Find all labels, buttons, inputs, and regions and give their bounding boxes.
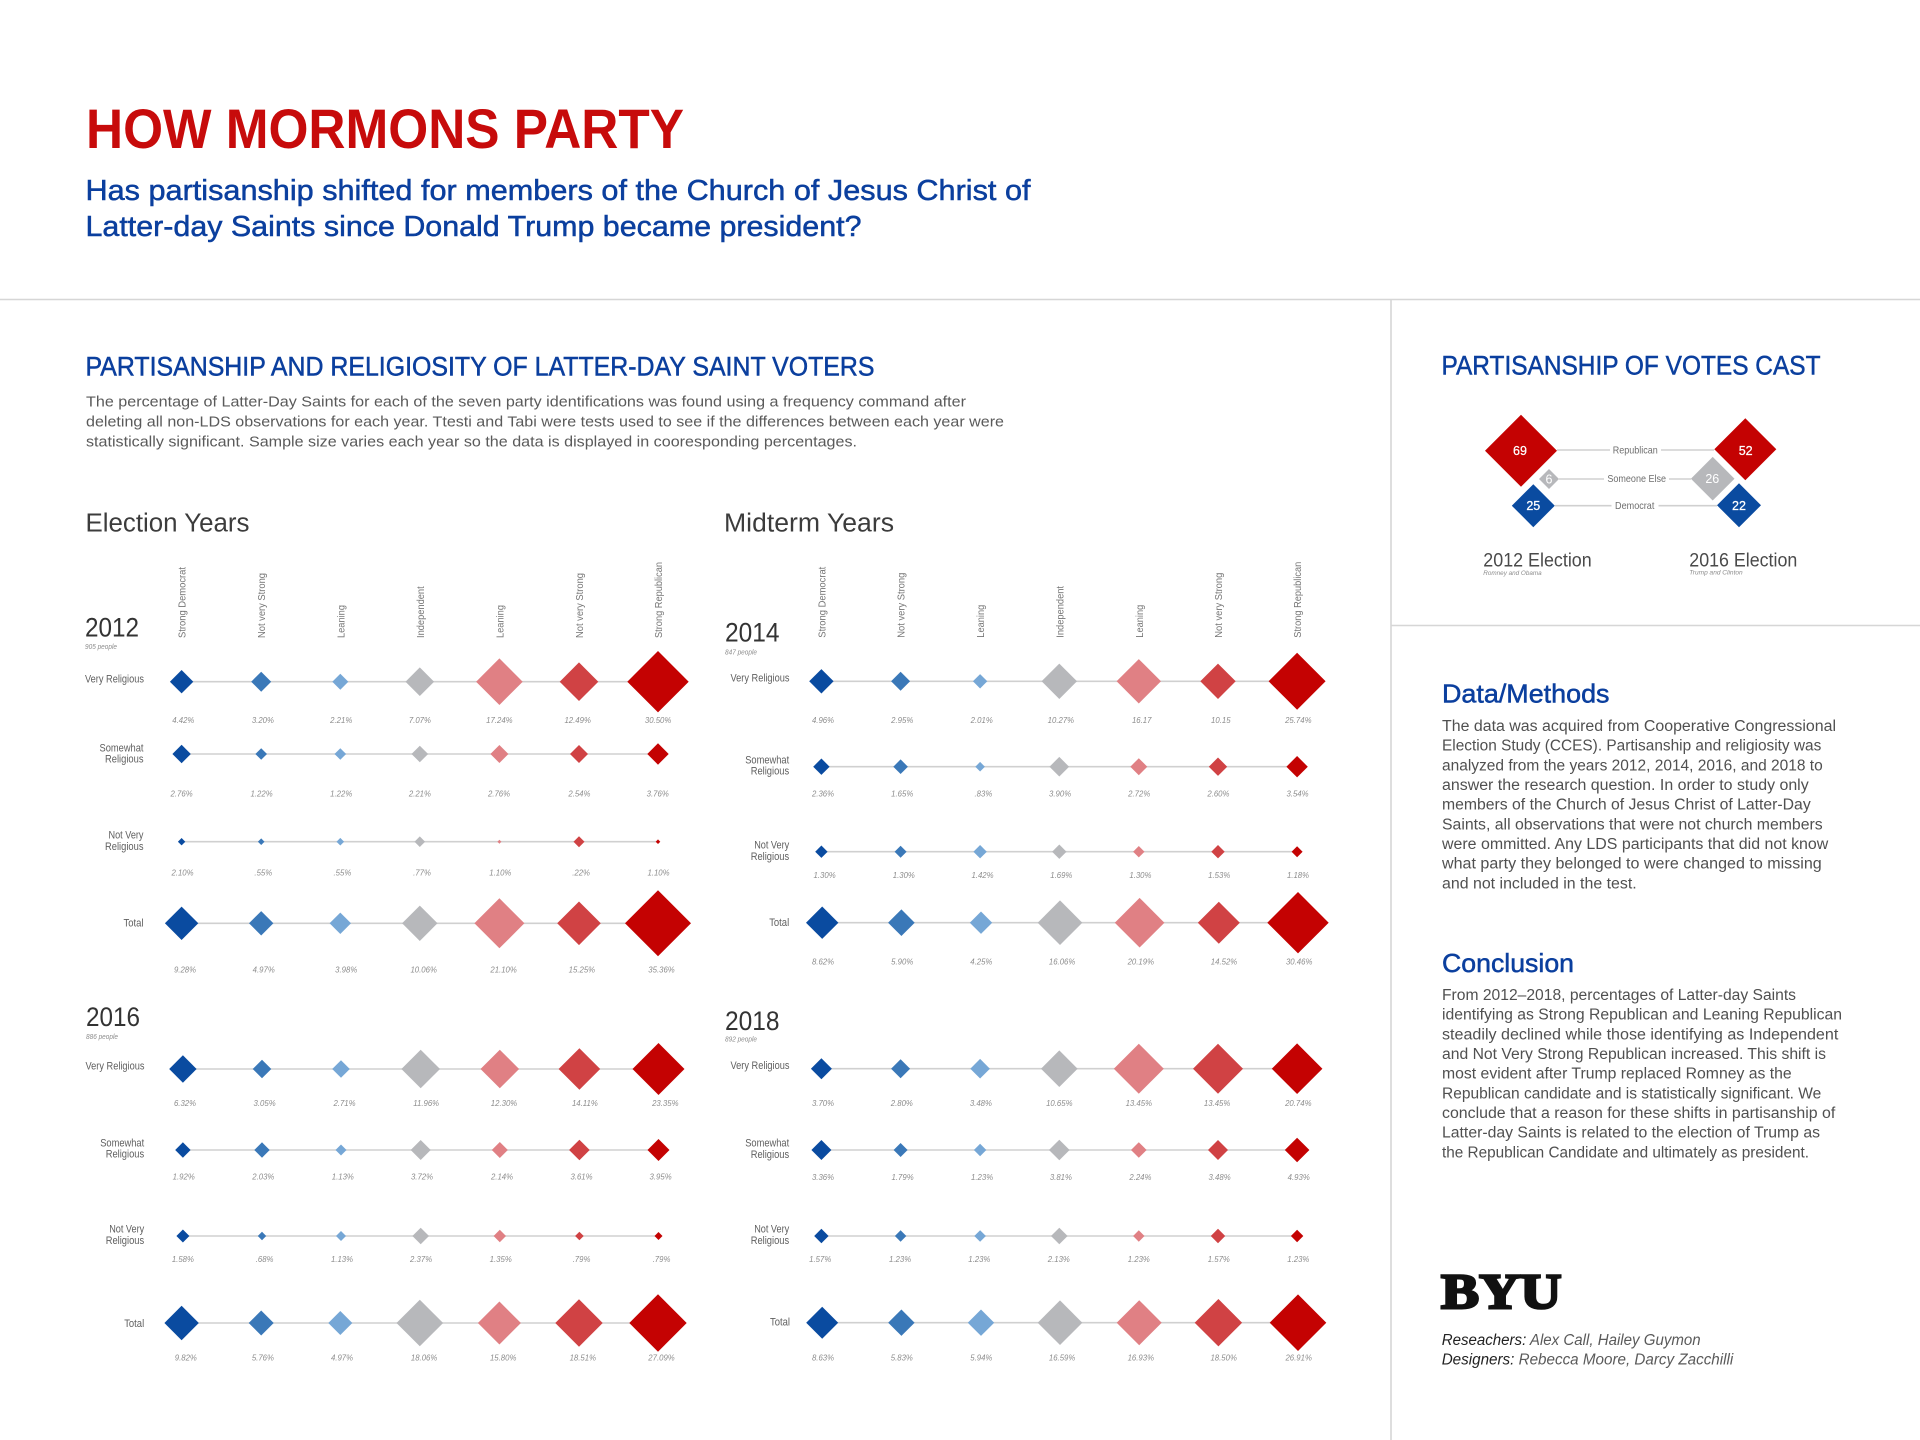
- row: 2018 not very religious: [814, 1228, 1303, 1244]
- percent labels 2018: 2.80%: [890, 1099, 913, 1108]
- row labels 2012: Somewhat: [100, 742, 144, 754]
- row: 2016 very religious: [169, 1043, 684, 1095]
- percent labels 2016: 3.05%: [254, 1099, 276, 1108]
- logo: BYU: BYU: [1441, 1263, 1562, 1319]
- percent labels 2012: 4.42%: [172, 716, 194, 725]
- percent labels 2018: 20.74%: [1284, 1099, 1312, 1108]
- percent labels 2018: 1.23%: [1128, 1255, 1150, 1264]
- chart: 2014: [725, 562, 1329, 966]
- percent labels 2014: 25.74%: [1284, 716, 1312, 725]
- percent labels 2016: 3.72%: [411, 1172, 433, 1181]
- percent labels 2016: .79%: [653, 1255, 670, 1264]
- percent labels 2016: 1.35%: [490, 1255, 512, 1264]
- percent labels 2014: 2.60%: [1206, 789, 1230, 798]
- percent labels 2014: 1.30%: [893, 871, 915, 880]
- column headers 2012: Not very Strong: [574, 573, 586, 638]
- percent labels 2012: 2.54%: [567, 789, 591, 798]
- percent labels 2018: 5.94%: [970, 1354, 992, 1363]
- percent labels 2016: 1.13%: [331, 1255, 353, 1264]
- percent labels 2016: .79%: [573, 1255, 590, 1264]
- percent labels 2016: 1.58%: [172, 1255, 194, 1264]
- percent labels 2012: 17.24%: [486, 716, 513, 725]
- column headers 2012: Leaning: [335, 605, 347, 638]
- row: 2012 somewhat religious: [172, 743, 669, 765]
- subtitle: Has partisanship shifted for members of the Church of Jesus Christ of: [86, 175, 1031, 207]
- percent labels 2014: 10.27%: [1048, 716, 1074, 725]
- percent labels 2012: 1.10%: [647, 868, 670, 877]
- diamond: 2012 someone else 6: [1539, 469, 1559, 489]
- percent labels 2018: 1.23%: [971, 1173, 993, 1182]
- percent labels 2018: 3.70%: [812, 1099, 834, 1108]
- text: conclusion: [1442, 987, 1842, 1161]
- row: 2012 very religious: [170, 651, 689, 712]
- diamond: 2012 democrat 25: 25: [1526, 499, 1540, 513]
- year label 2018: 2018: [725, 1006, 780, 1036]
- percent labels 2012: 35.36%: [648, 965, 675, 974]
- row labels 2016: Religious: [106, 1149, 145, 1161]
- year label 2012: 2012: [85, 613, 139, 643]
- year label 2016: 2016: [86, 1002, 140, 1032]
- percent labels 2012: .77%: [413, 868, 431, 877]
- row labels 2016: Somewhat: [100, 1137, 144, 1149]
- column headers 2012: Not very Strong: [256, 573, 268, 638]
- percent labels 2016: .68%: [256, 1255, 274, 1264]
- row labels 2012: Religious: [105, 754, 144, 766]
- label: 2012 election: Romney and Obama: [1483, 570, 1542, 577]
- percent labels 2016: 1.13%: [332, 1172, 354, 1181]
- diamond: 2012 republican 69: [1485, 415, 1557, 487]
- column headers 2012: Strong Republican: [653, 562, 665, 638]
- row labels 2018: Total: [770, 1317, 790, 1329]
- row: 2016 total: [164, 1294, 687, 1352]
- column headers 2012: Leaning: [494, 605, 506, 638]
- percent labels 2016: 4.97%: [331, 1354, 353, 1363]
- percent labels 2014: 2.72%: [1127, 789, 1150, 798]
- chart: 2018: [725, 1006, 1326, 1363]
- percent labels 2014: 14.52%: [1211, 957, 1237, 966]
- percent labels 2012: 21.10%: [489, 965, 517, 974]
- column headers 2012: Independent: [415, 586, 427, 638]
- percent labels 2018: 1.23%: [968, 1255, 990, 1264]
- credits: Reseachers: Alex Call, Hailey Guymon: [1442, 1332, 1701, 1349]
- percent labels 2012: 12.49%: [564, 716, 591, 725]
- percent labels 2018: [809, 1099, 1312, 1363]
- percent labels 2016: 1.92%: [173, 1172, 195, 1181]
- percent labels 2016: 18.51%: [570, 1354, 596, 1363]
- column headers 2014: Independent: [1054, 586, 1066, 638]
- row labels 2014: Not Very: [754, 840, 790, 852]
- percent labels 2016: 3.95%: [650, 1172, 672, 1181]
- row labels 2014: Religious: [751, 766, 790, 778]
- row labels 2018: [730, 1060, 790, 1329]
- percent labels 2014: .83%: [975, 789, 992, 798]
- percent labels 2012: 9.28%: [174, 965, 196, 974]
- percent labels 2016: 18.06%: [411, 1354, 437, 1363]
- row labels 2018: Very Religious: [730, 1060, 790, 1072]
- row labels 2018: Religious: [751, 1235, 790, 1247]
- percent labels 2014: 16.17: [1132, 716, 1152, 725]
- percent labels 2012: 30.50%: [645, 716, 671, 725]
- diamond: 2016 republican 52: 52: [1739, 444, 1753, 458]
- text: conclusion: conclude that a reason for these shifts in partisanship of: [1442, 1105, 1836, 1122]
- row labels 2014: [730, 673, 790, 929]
- percent labels 2014: 1.30%: [1129, 871, 1152, 880]
- percent labels 2018: 16.59%: [1049, 1354, 1075, 1363]
- percent labels 2012: 2.21%: [329, 716, 352, 725]
- percent labels 2016: 27.09%: [647, 1354, 675, 1363]
- percent labels 2014: 1.30%: [814, 871, 836, 880]
- row labels 2018: Religious: [751, 1149, 790, 1161]
- row: 2018 total: [806, 1294, 1326, 1351]
- text: data/methods: members of the Church of Jesus Christ of Latter-Day: [1442, 797, 1811, 814]
- row: 2016 not very religious: [176, 1228, 662, 1244]
- text: conclusion: steadily declined while those identifying as Independent: [1442, 1026, 1839, 1043]
- percent labels 2018: 16.93%: [1128, 1354, 1154, 1363]
- row labels 2012: Very Religious: [85, 674, 144, 686]
- percent labels 2012: .55%: [254, 868, 272, 877]
- percent labels 2012: 15.25%: [569, 965, 595, 974]
- percent labels 2018: 8.63%: [812, 1354, 834, 1363]
- percent labels 2014: 5.90%: [891, 957, 913, 966]
- percent labels 2016: [172, 1099, 679, 1363]
- intro text: deleting all non-LDS observations for each year. Ttesti and Tabi were tests used to see if the differences between each year were: [86, 415, 1004, 431]
- column headers 2014: Strong Democrat: [816, 567, 828, 638]
- connector: republican: Republican: [1613, 444, 1658, 456]
- percent labels 2018: 3.48%: [970, 1099, 992, 1108]
- percent labels 2014: 3.90%: [1049, 789, 1071, 798]
- text: data/methods: Saints, all observations that were not church members: [1442, 816, 1823, 833]
- percent labels 2012: 2.76%: [487, 789, 510, 798]
- row labels 2016: Not Very: [109, 1224, 145, 1236]
- percent labels 2014: 16.06%: [1049, 957, 1075, 966]
- percent labels 2016: 15.80%: [490, 1354, 516, 1363]
- percent labels 2018: 2.24%: [1128, 1173, 1152, 1182]
- percent labels 2016: 14.11%: [572, 1099, 598, 1108]
- label: 2012 election: 2012 Election: [1483, 551, 1592, 572]
- percent labels 2014: 30.46%: [1286, 957, 1312, 966]
- column headers 2012: Strong Democrat: [177, 567, 189, 638]
- subtitle: [86, 175, 1031, 243]
- title: HOW MORMONS PARTY: [86, 97, 684, 160]
- percent labels 2018: 1.57%: [809, 1255, 831, 1264]
- diamond: 2016 republican 52: [1714, 418, 1776, 480]
- row: 2018 very religious: [811, 1043, 1322, 1094]
- percent labels 2018: 1.23%: [1287, 1255, 1309, 1264]
- percent labels 2014: 1.65%: [891, 789, 913, 798]
- row labels 2018: Somewhat: [745, 1138, 789, 1150]
- diamond: 2016 someone else 26: 26: [1705, 472, 1719, 486]
- row labels 2014: Total: [769, 917, 789, 929]
- row: 2014 not very religious: [815, 844, 1303, 859]
- connector: someone else: Someone Else: [1607, 473, 1666, 485]
- text: conclusion: Latter-day Saints is related to the election of Trump as: [1442, 1125, 1820, 1142]
- percent labels 2016: 23.35%: [651, 1099, 679, 1108]
- row labels 2016: Total: [124, 1318, 144, 1330]
- chart: 2016: [86, 1002, 687, 1363]
- row: 2018 somewhat religious: [811, 1138, 1309, 1162]
- percent labels 2014: 1.18%: [1287, 871, 1309, 880]
- row labels 2014: Very Religious: [730, 673, 790, 685]
- chart: votes cast: [1483, 415, 1797, 577]
- percent labels 2018: 2.13%: [1047, 1255, 1070, 1264]
- row labels 2016: Religious: [106, 1235, 145, 1247]
- intro text: [86, 395, 1004, 451]
- column headers 2012: [177, 562, 665, 638]
- percent labels 2018: 26.91%: [1284, 1354, 1312, 1363]
- percent labels 2014: [811, 716, 1312, 966]
- percent labels 2014: 2.95%: [890, 716, 913, 725]
- percent labels 2012: 1.22%: [330, 789, 352, 798]
- year label 2014: 847 people: [725, 650, 757, 657]
- percent labels 2016: 2.37%: [409, 1255, 432, 1264]
- percent labels 2012: 2.76%: [170, 789, 193, 798]
- text: data/methods: what party they belonged to were changed to missing: [1441, 856, 1822, 873]
- percent labels 2012: 3.76%: [647, 789, 669, 798]
- row labels 2012: Not Very: [108, 830, 144, 842]
- row labels 2014: Somewhat: [745, 754, 789, 766]
- text: data/methods: Election Study (CCES). Partisanship and religiosity was: [1442, 738, 1822, 755]
- text: data/methods: answer the research question. In order to study only: [1442, 777, 1809, 794]
- diamond: 2012 someone else 6: 6: [1546, 472, 1553, 486]
- heading: data/methods: Data/Methods: [1442, 679, 1610, 709]
- percent labels 2018: 18.50%: [1210, 1354, 1237, 1363]
- percent labels 2016: 11.96%: [413, 1099, 439, 1108]
- percent labels 2018: 5.83%: [891, 1354, 913, 1363]
- percent labels 2018: 3.36%: [812, 1173, 834, 1182]
- text: conclusion: identifying as Strong Republican and Leaning Republican: [1442, 1007, 1842, 1024]
- percent labels 2018: 13.45%: [1126, 1099, 1152, 1108]
- row labels 2016: [86, 1061, 145, 1330]
- percent labels 2012: 10.06%: [410, 965, 437, 974]
- percent labels 2018: 1.57%: [1208, 1255, 1230, 1264]
- percent labels 2014: 10.15: [1211, 716, 1231, 725]
- row labels 2016: Very Religious: [86, 1061, 145, 1073]
- percent labels 2014: 3.54%: [1286, 789, 1309, 798]
- text: conclusion: and Not Very Strong Republican increased. This shift is: [1442, 1046, 1826, 1063]
- percent labels 2012: 1.10%: [489, 868, 511, 877]
- diamond: 2012 democrat 25: [1512, 484, 1555, 527]
- heading: conclusion: Conclusion: [1442, 948, 1574, 978]
- connector: democrat: Democrat: [1615, 500, 1654, 512]
- percent labels 2016: 9.82%: [175, 1354, 197, 1363]
- percent labels 2016: 3.61%: [570, 1172, 593, 1181]
- row: 2014 somewhat religious: [813, 756, 1308, 777]
- percent labels 2018: 1.23%: [889, 1255, 911, 1264]
- label: 2016 election: 2016 Election: [1689, 551, 1797, 572]
- row: 2012 not very religious: [178, 836, 660, 847]
- intro text: The percentage of Latter-Day Saints for each of the seven party identifications was found using a frequency command after: [86, 395, 966, 411]
- diamond: 2016 democrat 22: 22: [1732, 499, 1746, 513]
- percent labels 2016: 6.32%: [174, 1099, 196, 1108]
- row: 2014 very religious: [809, 653, 1326, 710]
- percent labels 2012: 2.21%: [408, 789, 431, 798]
- row labels 2014: Religious: [751, 851, 790, 863]
- text: data/methods: [1441, 718, 1836, 892]
- percent labels 2014: 2.36%: [811, 789, 834, 798]
- row labels 2012: Religious: [105, 841, 144, 853]
- label: 2016 election: Trump and Clinton: [1689, 570, 1743, 577]
- percent labels 2018: 1.79%: [892, 1173, 914, 1182]
- column headers 2014: [816, 562, 1304, 638]
- diamond: 2016 democrat 22: [1717, 483, 1761, 527]
- diamond: 2012 republican 69: 69: [1513, 444, 1527, 458]
- percent labels 2014: 4.96%: [812, 716, 834, 725]
- column headers 2014: Leaning: [1134, 605, 1146, 638]
- percent labels 2014: 1.53%: [1208, 871, 1230, 880]
- percent labels 2012: .22%: [572, 868, 590, 877]
- column headers 2014: Strong Republican: [1292, 562, 1304, 638]
- percent labels 2018: 13.45%: [1204, 1099, 1230, 1108]
- heading: partisanship of votes cast: PARTISANSHIP OF VOTES CAST: [1442, 350, 1820, 380]
- percent labels 2012: 3.98%: [335, 965, 357, 974]
- heading: midterm years: Midterm Years: [724, 510, 894, 538]
- column headers 2014: Leaning: [975, 605, 987, 638]
- row labels 2012: [85, 674, 144, 930]
- percent labels 2014: 4.25%: [970, 957, 992, 966]
- text: conclusion: From 2012–2018, percentages of Latter-day Saints: [1442, 987, 1796, 1004]
- row labels 2012: Total: [124, 918, 144, 930]
- percent labels 2012: 3.20%: [252, 716, 274, 725]
- diamond: 2016 someone else 26: [1691, 457, 1734, 500]
- column headers 2014: Not very Strong: [1213, 573, 1225, 638]
- row: 2014 total: [806, 892, 1329, 953]
- percent labels 2018: 4.93%: [1288, 1173, 1310, 1182]
- percent labels 2016: 2.71%: [332, 1099, 356, 1108]
- percent labels 2016: 5.76%: [252, 1354, 274, 1363]
- text: data/methods: analyzed from the years 2012, 2014, 2016, and 2018 to: [1442, 757, 1823, 774]
- percent labels 2012: 1.22%: [251, 789, 273, 798]
- credits: Designers: Rebecca Moore, Darcy Zacchilli: [1442, 1351, 1734, 1368]
- text: data/methods: and not included in the test.: [1442, 875, 1637, 892]
- percent labels 2012: 2.10%: [170, 868, 194, 877]
- percent labels 2014: 20.19%: [1127, 957, 1154, 966]
- percent labels 2014: 1.42%: [971, 871, 994, 880]
- year label 2018: 892 people: [725, 1037, 757, 1044]
- percent labels 2012: 4.97%: [253, 965, 275, 974]
- heading: election years: Election Years: [86, 510, 249, 538]
- subtitle: Latter-day Saints since Donald Trump became president?: [86, 211, 862, 243]
- column headers 2014: Not very Strong: [896, 573, 908, 638]
- heading: partisanship and religiosity: PARTISANSHIP AND RELIGIOSITY OF LATTER-DAY SAINT VOTERS: [86, 352, 874, 382]
- percent labels 2014: 1.69%: [1050, 871, 1072, 880]
- chart: 2012: [85, 562, 691, 974]
- row: 2012 total: [165, 890, 691, 956]
- year label 2014: 2014: [725, 618, 780, 648]
- year label 2016: 886 people: [86, 1034, 118, 1041]
- percent labels 2018: 10.65%: [1046, 1099, 1073, 1108]
- text: conclusion: Republican candidate and is statistically significant. We: [1442, 1085, 1821, 1102]
- percent labels 2018: 3.48%: [1209, 1173, 1231, 1182]
- percent labels 2014: 8.62%: [812, 957, 834, 966]
- row labels 2018: Not Very: [754, 1224, 790, 1236]
- percent labels 2012: [170, 716, 675, 974]
- text: data/methods: The data was acquired from Cooperative Congressional: [1442, 718, 1836, 735]
- percent labels 2014: 2.01%: [970, 716, 993, 725]
- year label 2012: 905 people: [85, 644, 117, 651]
- percent labels 2016: 2.14%: [490, 1172, 513, 1181]
- connector: someone else: [1559, 473, 1691, 485]
- percent labels 2016: 2.03%: [251, 1172, 274, 1181]
- intro text: statistically significant. Sample size varies each year so the data is displayed in cooresponding percentages.: [86, 435, 857, 451]
- percent labels 2012: .55%: [334, 868, 351, 877]
- row: 2016 somewhat religious: [175, 1139, 669, 1161]
- text: data/methods: were ommitted. Any LDS participants that did not know: [1441, 836, 1829, 853]
- percent labels 2016: 12.30%: [491, 1099, 517, 1108]
- percent labels 2018: 3.81%: [1050, 1173, 1072, 1182]
- text: conclusion: the Republican Candidate and ultimately as president.: [1442, 1144, 1809, 1161]
- text: conclusion: most evident after Trump replaced Romney as the: [1442, 1066, 1792, 1083]
- percent labels 2012: 7.07%: [409, 716, 431, 725]
- credits: [1442, 1332, 1734, 1368]
